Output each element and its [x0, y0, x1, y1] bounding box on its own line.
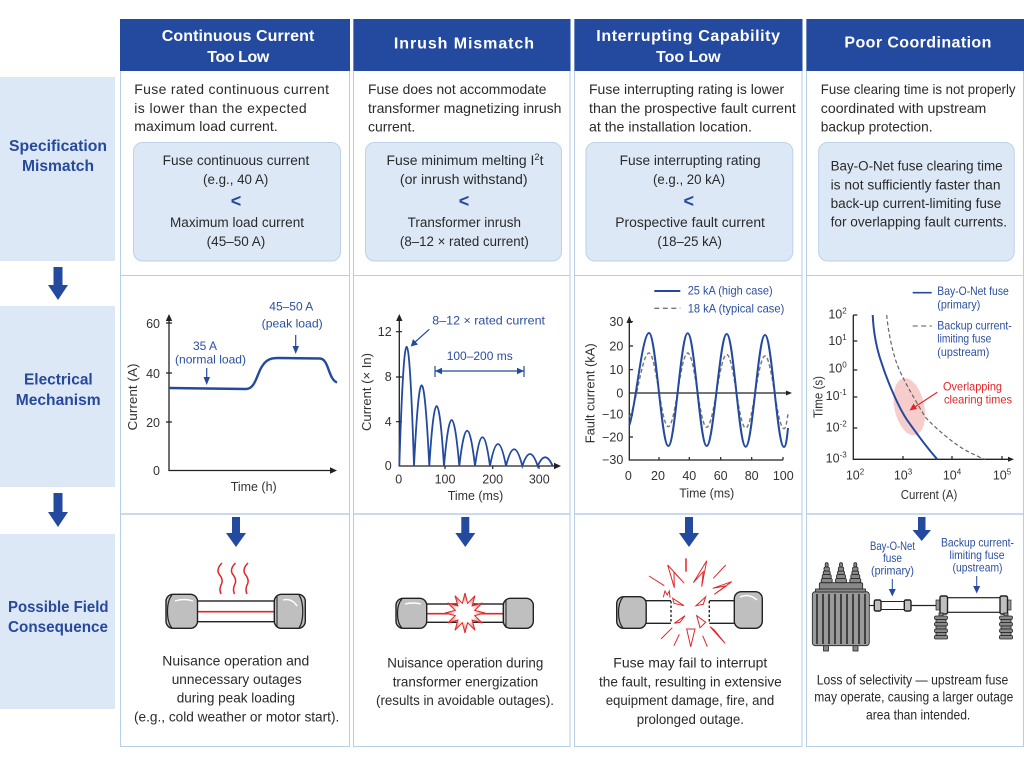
description text — [589, 81, 796, 134]
diagram labels: fuse identifiers: (primary) — [871, 564, 914, 578]
diagram labels: fuse identifiers: Bay-O-Net — [870, 539, 916, 553]
chart: time-current coordination curves: -1 — [840, 388, 847, 397]
chart: time-current coordination curves: -2 — [840, 420, 847, 429]
chart legend: 18 kA (typical case) — [688, 301, 784, 315]
consequence text: during peak loading — [177, 690, 295, 706]
callout: overlapping clearing times — [910, 380, 1012, 410]
chart: time-current coordination curves: 0 — [842, 361, 847, 370]
consequence text: equipment damage, fire, and — [606, 692, 774, 708]
icon: bay-o-net fuse — [869, 600, 937, 611]
comparison box — [366, 142, 562, 261]
chart: fault current waveforms: 100 — [773, 469, 794, 483]
chart: decaying inrush current: 100 — [435, 472, 455, 486]
chart: time-current coordination curves: 4 — [957, 467, 962, 476]
description text: coordinated with upstream — [821, 100, 986, 116]
chart: decaying inrush current: 8–12 × rated current — [432, 313, 546, 327]
chart: fault current waveforms: Fault current (kA) — [584, 343, 598, 443]
chart legend — [654, 284, 784, 315]
line chart: load current over time: Time (h) — [231, 480, 277, 494]
chart: fault current waveforms: 0 — [616, 386, 623, 400]
chart: time-current coordination curves: -3 — [840, 451, 847, 460]
description text — [821, 81, 1016, 134]
description text: current. — [368, 118, 415, 134]
chart: decaying inrush current — [360, 313, 561, 503]
chart: decaying inrush current: 200 — [482, 472, 503, 486]
consequence text — [599, 655, 782, 727]
comparison box: < — [684, 191, 694, 211]
explanation box: Bay-O-Net fuse clearing time — [831, 159, 1003, 174]
consequence text: Nuisance operation during — [387, 655, 543, 671]
chart legend: Bay-O-Net fuse — [937, 284, 1009, 298]
diagram labels: fuse identifiers: Backup current- — [941, 536, 1014, 550]
column: inrush mismatch — [353, 19, 570, 746]
row label: possible field consequence: Consequence — [8, 619, 108, 636]
chart: decaying inrush current: 4 — [385, 415, 392, 429]
chart: time-current coordination curves: 2 — [842, 306, 847, 315]
column: poor coordination — [806, 19, 1024, 746]
line chart: load current over time: 60 — [146, 317, 160, 331]
comparison box — [586, 142, 793, 261]
comparison box: t — [540, 153, 544, 168]
description text: Fuse rated continuous current — [134, 81, 329, 97]
chart: time-current coordination curves: Current (A) — [901, 488, 957, 502]
column header: Poor Coordination — [844, 34, 991, 51]
comparison box: Prospective fault current — [615, 215, 765, 230]
chart legend: Backup current- — [937, 318, 1012, 332]
line chart: load current over time: 40 — [146, 367, 160, 381]
chart: fault current waveforms: −20 — [602, 431, 623, 445]
column header — [120, 19, 350, 71]
diagram labels: fuse identifiers: fuse — [883, 551, 902, 565]
description text: Fuse interrupting rating is lower — [589, 81, 785, 97]
column header: Too Low — [656, 49, 721, 66]
comparison box: (45–50 A) — [207, 234, 265, 249]
consequence text — [814, 671, 1013, 722]
arrow: mechanism to consequence — [48, 493, 68, 527]
explanation box: back-up current-limiting fuse — [831, 196, 1001, 211]
row label: possible field consequence: Possible Field — [8, 599, 108, 616]
chart: decaying inrush current: 300 — [529, 472, 550, 486]
chart: time-current coordination curves: Time (s) — [812, 376, 826, 418]
column header: Inrush Mismatch — [394, 35, 534, 52]
row label: electrical mechanism: Mechanism — [16, 392, 101, 409]
chart: time-current coordination curves: 2 — [860, 467, 865, 476]
chart legend: 25 kA (high case) — [688, 284, 773, 298]
row label: specification mismatch: Mismatch — [22, 158, 94, 175]
chart: fault current waveforms: 0 — [625, 469, 632, 483]
comparison box: < — [459, 191, 469, 211]
comparison box: Fuse minimum melting I — [386, 153, 530, 168]
comparison box: (18–25 kA) — [657, 234, 722, 249]
description text: Fuse clearing time is not properly — [821, 81, 1016, 97]
chart: fault current waveforms: 10 — [609, 363, 623, 377]
chart: decaying inrush current: 8 — [385, 370, 392, 384]
row label: specification mismatch: Specification — [9, 138, 107, 155]
comparison box: (e.g., 20 kA) — [653, 172, 725, 187]
chart: time-current coordination curves: 10 — [993, 468, 1007, 482]
line chart: load current over time: 20 — [146, 416, 160, 430]
chart: fault current waveforms: 30 — [609, 315, 623, 329]
line chart: load current over time — [126, 300, 337, 494]
description text — [134, 81, 329, 134]
chart: fault current waveforms: 60 — [714, 469, 728, 483]
icon: overheating fuse — [166, 563, 305, 628]
arrow: specification to mechanism — [48, 267, 68, 300]
description text: maximum load current. — [134, 118, 278, 134]
line chart: load current over time: 35 A — [193, 339, 217, 353]
callout: overlapping clearing times: Overlapping — [943, 380, 1002, 394]
line chart: load current over time: (normal load) — [175, 352, 246, 366]
comparison box: (e.g., 40 A) — [203, 172, 268, 187]
consequence text — [376, 655, 554, 708]
row label: electrical mechanism: Electrical — [24, 372, 93, 388]
icon: ruptured fuse with burst — [617, 558, 762, 647]
chart: decaying inrush current: Current (× In) — [360, 353, 374, 431]
chart: fault current waveforms: 20 — [609, 340, 623, 354]
consequence text: area than intended. — [866, 706, 970, 722]
consequence text: (e.g., cold weather or motor start). — [134, 708, 339, 724]
column header: Interrupting Capability — [596, 28, 780, 45]
icon: transformer — [812, 563, 869, 651]
row label: electrical mechanism — [0, 306, 115, 487]
arrow: down to consequence — [912, 517, 931, 541]
column: continuous current too low — [120, 19, 350, 746]
chart: time-current coordination curves: 10 — [894, 468, 908, 482]
row labels rail — [0, 77, 115, 709]
description text — [368, 81, 562, 134]
consequence text: (results in avoidable outages). — [376, 692, 554, 708]
consequence text: prolonged outage. — [637, 711, 744, 727]
chart: time-current coordination curves: 10 — [826, 421, 840, 435]
consequence text: the fault, resulting in extensive — [599, 673, 782, 689]
description text: at the installation location. — [589, 118, 752, 134]
chart: time-current coordination curves: 10 — [846, 468, 860, 482]
explanation box: for overlapping fault currents. — [831, 215, 1007, 230]
comparison box: Transformer inrush — [408, 215, 521, 230]
diagram labels: fuse identifiers — [870, 536, 1014, 596]
chart: decaying inrush current: 12 — [378, 325, 392, 339]
chart: decaying inrush current: 0 — [385, 459, 392, 473]
comparison box: 2 — [534, 152, 540, 162]
icon: fuse with internal arc — [396, 593, 533, 633]
column header: Continuous Current — [162, 28, 315, 45]
diagram labels: fuse identifiers: (upstream) — [952, 560, 1003, 574]
description text: is lower than the expected — [134, 100, 307, 116]
icon: backup current-limiting fuse — [934, 596, 1012, 639]
chart: fault current waveforms: 80 — [745, 469, 759, 483]
explanation box: is not sufficiently faster than — [831, 177, 1000, 192]
line chart: load current over time: Current (A) — [126, 364, 140, 430]
comparison box: (or inrush withstand) — [400, 172, 528, 187]
consequence text: Fuse may fail to interrupt — [613, 655, 767, 671]
comparison box: Fuse interrupting rating — [620, 153, 761, 168]
chart: fault current waveforms: 20 — [651, 469, 665, 483]
diagram labels: fuse identifiers: limiting fuse — [950, 548, 1005, 562]
column header — [806, 19, 1024, 71]
column: interrupting capability too low — [574, 19, 802, 746]
chart legend: limiting fuse — [937, 332, 992, 346]
chart: decaying inrush current: 100–200 ms — [447, 349, 513, 363]
description text: Fuse does not accommodate — [368, 81, 547, 97]
consequence text: transformer energization — [393, 673, 538, 689]
arrow: down to consequence — [679, 517, 699, 547]
column header — [574, 19, 802, 71]
chart: fault current waveforms: 40 — [682, 469, 696, 483]
chart: time-current coordination curves: 10 — [826, 389, 840, 403]
chart: fault current waveforms — [584, 284, 794, 500]
chart: time-current coordination curves: 10 — [826, 452, 840, 466]
line chart: load current over time: (peak load) — [262, 317, 323, 331]
consequence text: Nuisance operation and — [162, 652, 309, 668]
chart: decaying inrush current: Time (ms) — [448, 489, 503, 503]
column header: Too Low — [207, 49, 270, 66]
chart legend: (primary) — [937, 298, 980, 312]
consequence text: unnecessary outages — [172, 671, 302, 687]
chart: fault current waveforms: −30 — [602, 453, 623, 467]
line chart: load current over time: 0 — [153, 464, 160, 478]
chart legend: (upstream) — [937, 345, 989, 359]
description text: backup protection. — [821, 118, 932, 134]
chart: decaying inrush current: 0 — [395, 472, 402, 486]
chart: fault current waveforms: −10 — [602, 408, 623, 422]
explanation box — [819, 142, 1014, 261]
description text: than the prospective fault current — [589, 100, 796, 116]
chart: time-current coordination curves: 10 — [828, 362, 842, 376]
arrow: down to consequence — [226, 517, 246, 547]
chart: fault current waveforms: Time (ms) — [679, 486, 734, 500]
line chart: load current over time: 45–50 A — [269, 300, 313, 314]
comparison box: < — [231, 191, 241, 211]
comparison box — [134, 142, 340, 261]
description text: transformer magnetizing inrush — [368, 100, 562, 116]
chart: time-current coordination curves: 10 — [828, 334, 842, 348]
arrow: down to consequence — [455, 517, 475, 547]
chart: time-current coordination curves: 5 — [1007, 467, 1012, 476]
chart: time-current coordination curves — [812, 284, 1014, 502]
comparison box: (8–12 × rated current) — [400, 234, 529, 249]
column header — [354, 19, 570, 71]
chart: time-current coordination curves: 1 — [842, 333, 847, 342]
comparison box: Maximum load current — [170, 215, 304, 230]
chart legend — [913, 284, 1012, 359]
chart: time-current coordination curves: 10 — [828, 307, 842, 321]
chart: time-current coordination curves: 10 — [943, 468, 957, 482]
row label: possible field consequence — [0, 534, 115, 709]
chart: time-current coordination curves: 3 — [908, 467, 913, 476]
consequence text — [134, 652, 339, 724]
comparison box: Fuse continuous current — [163, 153, 310, 168]
row label: specification mismatch — [0, 77, 115, 261]
callout: overlapping clearing times: clearing times — [944, 392, 1012, 406]
